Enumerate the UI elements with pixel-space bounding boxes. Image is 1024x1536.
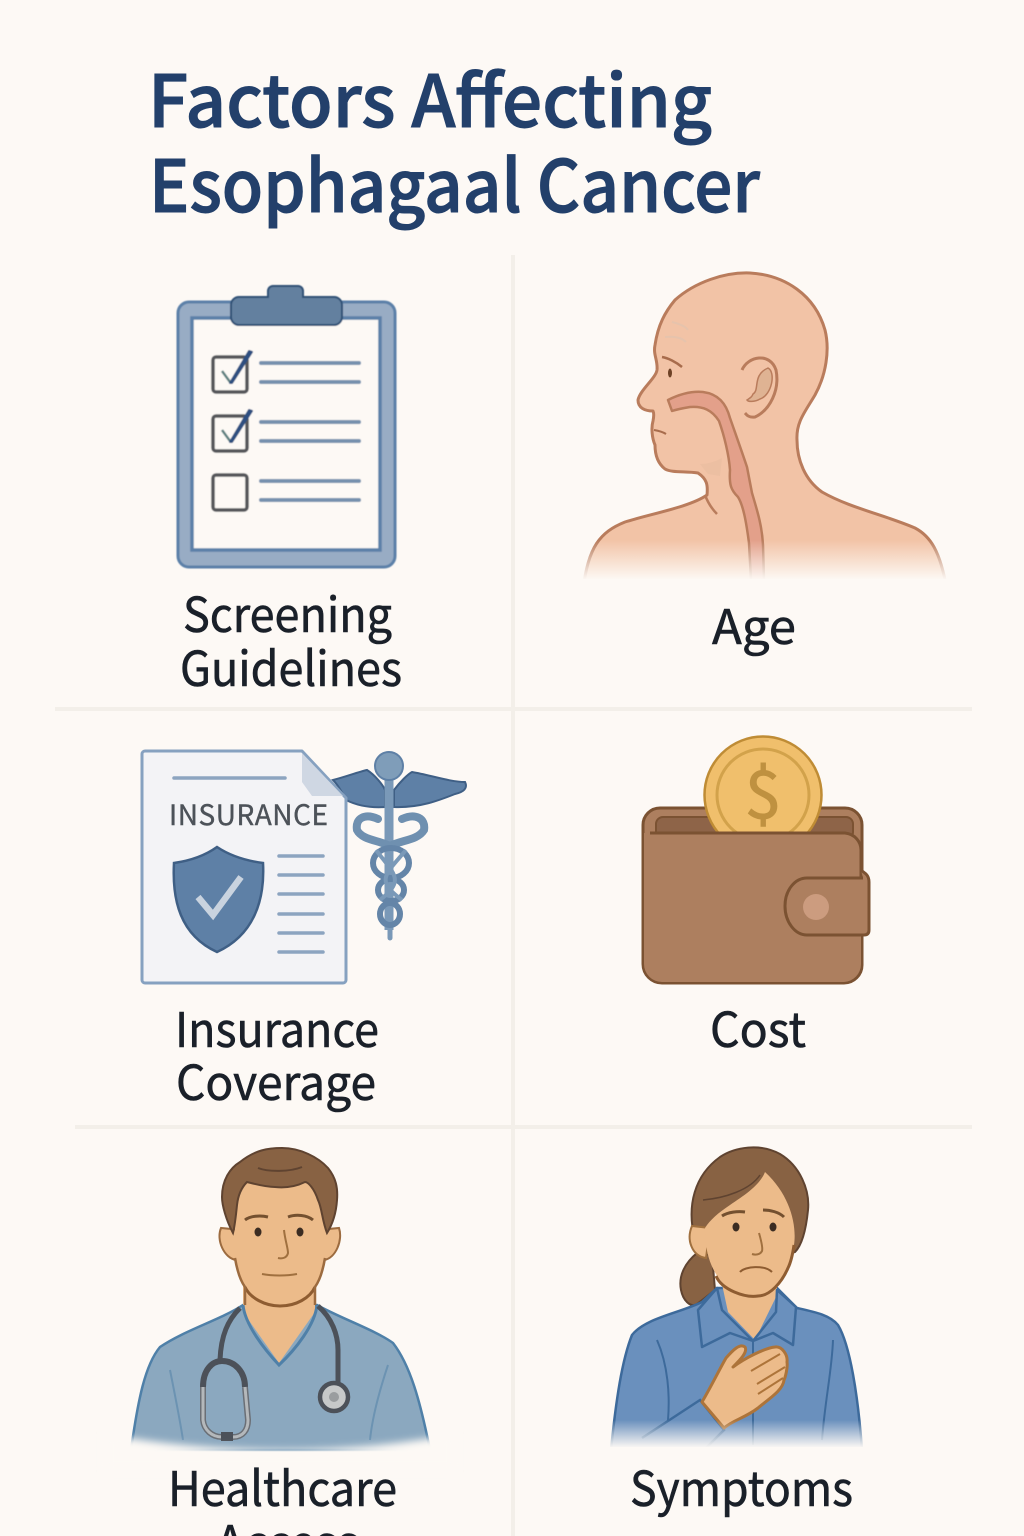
- label: insurance coverage: Coverage: [176, 1044, 376, 1114]
- icon: clipboard checklist: [178, 286, 395, 567]
- label: cost: Cost: [710, 991, 806, 1061]
- panel: healthcare access: [105, 1148, 455, 1536]
- label: insurance coverage: [175, 991, 379, 1114]
- label: screening guidelines: Guidelines: [180, 630, 402, 700]
- panel: symptoms: [600, 1147, 880, 1520]
- icon: head profile with esophagus: [560, 273, 970, 599]
- label: symptoms: Symptoms: [630, 1450, 853, 1520]
- title: Factors Affecting: [148, 43, 712, 148]
- label: healthcare access: Healthcare: [168, 1450, 397, 1520]
- panel: cost: [643, 736, 869, 1061]
- icon: gold coin and wallet: [643, 736, 869, 983]
- label: screening guidelines: [180, 576, 402, 700]
- panel: age: [560, 273, 970, 658]
- icon: doctor portrait: [105, 1148, 455, 1470]
- icon: gold coin and wallet: $: [745, 742, 781, 838]
- label: screening guidelines: Screening: [183, 576, 392, 646]
- label: age: Age: [712, 588, 796, 658]
- title: [148, 43, 761, 233]
- label: insurance coverage: Insurance: [175, 991, 379, 1061]
- icon: insurance document: [142, 751, 346, 983]
- panel: screening guidelines: [178, 286, 402, 700]
- icon: caduceus: [333, 752, 466, 938]
- icon: woman holding chest: [600, 1147, 880, 1459]
- panel: insurance coverage: [142, 751, 466, 1114]
- title: Esophagaal Cancer: [149, 128, 761, 233]
- icon: insurance document: INSURANCE: [169, 794, 328, 834]
